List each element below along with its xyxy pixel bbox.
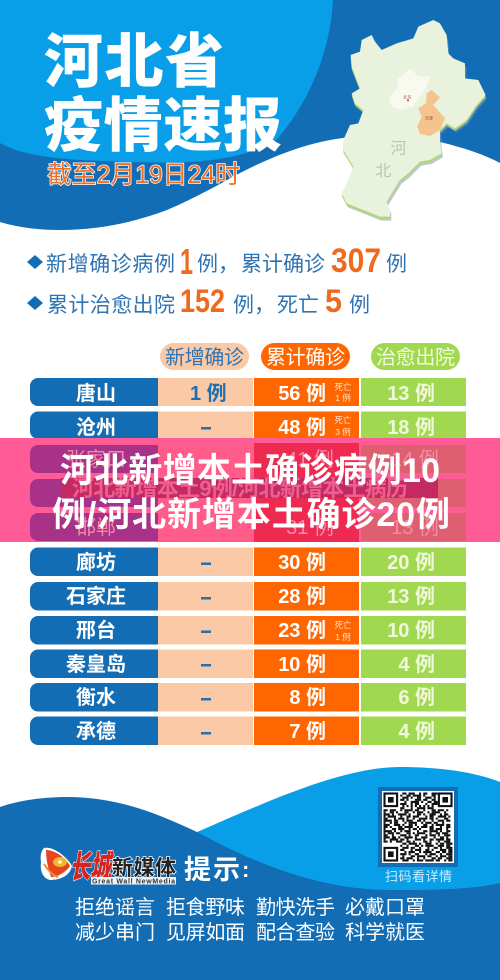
hidden rows under banner: 张家口 bbox=[66, 448, 126, 471]
map surface bbox=[342, 20, 486, 217]
logo wordmark: 新媒体 bbox=[112, 856, 176, 880]
map labels: 河 bbox=[391, 139, 407, 157]
row: 廊坊: 20 例 bbox=[387, 551, 435, 574]
table column headers: 治愈出院 bbox=[376, 346, 455, 369]
tips: 拒绝谣言 bbox=[75, 896, 155, 919]
logo icon bbox=[41, 848, 72, 880]
row: 承德 bbox=[30, 716, 466, 745]
summary line 1: 新增确诊病例 bbox=[46, 253, 175, 276]
row: 邢台: 23 例 bbox=[278, 619, 326, 642]
map labels: 北 bbox=[375, 162, 391, 180]
row: 秦皇岛: 4 例 bbox=[398, 653, 435, 676]
row: 衡水: 衡水 bbox=[76, 686, 116, 709]
row: 承德: 承德 bbox=[76, 720, 116, 743]
summary line 2: 152 bbox=[180, 283, 225, 319]
summary line 1 bbox=[27, 241, 407, 282]
row: 石家庄: 13 例 bbox=[387, 585, 435, 608]
tips: 见屏如面 bbox=[166, 921, 245, 944]
row: 秦皇岛 bbox=[30, 650, 466, 678]
map labels: 北京 bbox=[403, 93, 411, 99]
Beijing bbox=[388, 68, 430, 110]
row: 沧州: 3 例 bbox=[335, 427, 351, 437]
summary line 2: 死亡 bbox=[277, 294, 319, 317]
summary line 1: 累计确诊 bbox=[241, 253, 325, 276]
hidden rows under banner: 31 例 bbox=[286, 516, 334, 539]
hidden rows under banner bbox=[30, 443, 466, 542]
logo script: 长城 bbox=[70, 849, 114, 885]
summary line 2: 例 bbox=[349, 294, 370, 317]
pink banner bbox=[0, 438, 500, 542]
banner headline: 例/河北新增本土确诊20例 bbox=[52, 496, 450, 534]
row: 唐山: 1 例 bbox=[190, 382, 227, 405]
row: 邢台 bbox=[30, 616, 466, 644]
map labels: 天津 bbox=[425, 115, 433, 121]
row: 秦皇岛: 10 例 bbox=[278, 653, 326, 676]
row: 邢台: 邢台 bbox=[76, 618, 116, 642]
row: 沧州 bbox=[30, 412, 466, 439]
row: 沧州: 18 例 bbox=[387, 416, 435, 439]
row: 唐山: 1 例 bbox=[335, 393, 351, 403]
hidden rows under banner: 河北新增本土9例/河北新增本土病历 bbox=[72, 476, 408, 501]
row: 衡水: 8 例 bbox=[289, 686, 326, 709]
row: 石家庄: 28 例 bbox=[278, 585, 326, 608]
row: 沧州: 48 例 bbox=[278, 416, 326, 439]
row: 廊坊 bbox=[30, 548, 466, 576]
row: 唐山 bbox=[30, 378, 466, 406]
tips: 科学就医 bbox=[345, 921, 425, 944]
title: 河北省疫情速报 bbox=[44, 29, 282, 159]
banner headline: 河北新增本土确诊病例10 bbox=[60, 452, 440, 490]
summary line 2: 累计治愈出院 bbox=[47, 294, 175, 317]
table column headers: 累计确诊 bbox=[266, 346, 345, 369]
hidden rows under banner: 邯郸 bbox=[76, 516, 116, 539]
row: 承德: 7 例 bbox=[289, 720, 326, 743]
summary line 1: 例， bbox=[197, 253, 239, 276]
map shadow and edge bbox=[342, 22, 487, 221]
footer background bbox=[0, 767, 500, 980]
hidden rows under banner: 41 例 bbox=[286, 448, 334, 471]
summary line 2: 5 bbox=[325, 283, 342, 319]
row: 衡水 bbox=[30, 683, 466, 712]
row: 承德: 4 例 bbox=[398, 720, 435, 743]
header background bbox=[0, 0, 500, 240]
heading: 提示: 提示 bbox=[184, 855, 240, 885]
hidden rows under banner: 13 例 bbox=[391, 516, 439, 539]
title: 河北省疫情速报: 河北省 bbox=[44, 29, 224, 95]
table column headers bbox=[160, 343, 460, 370]
row: 邢台: 1 例 bbox=[335, 632, 351, 642]
summary line 1: 例 bbox=[386, 253, 407, 276]
row: 秦皇岛: 秦皇岛 bbox=[66, 652, 126, 676]
summary line 1: 1 bbox=[180, 241, 193, 282]
summary line 1: 307 bbox=[331, 242, 381, 280]
QR code bbox=[378, 787, 458, 867]
row: 廊坊: 廊坊 bbox=[76, 550, 116, 574]
hidden rows under banner: 14 例 bbox=[391, 448, 439, 471]
date: 截至2月19日24时: 截至2月19日24时 bbox=[47, 161, 240, 189]
summary line 2: 例， bbox=[233, 294, 275, 317]
banner headline bbox=[52, 452, 450, 534]
logo tagline: Great Wall NewMedia bbox=[92, 878, 175, 886]
row: 石家庄: 石家庄 bbox=[66, 584, 126, 608]
row: 石家庄 bbox=[30, 582, 466, 610]
map of Hebei bbox=[342, 20, 487, 221]
QR caption: 扫码看详情 bbox=[385, 869, 452, 884]
heading: 提示: : bbox=[242, 857, 249, 882]
row: 沧州: 死亡 bbox=[334, 415, 352, 425]
row: 唐山: 死亡 bbox=[334, 382, 352, 392]
tips bbox=[75, 896, 425, 944]
tips: 配合查验 bbox=[256, 921, 335, 944]
tips: 必戴口罩 bbox=[345, 896, 425, 919]
title: 河北省疫情速报: 疫情速报 bbox=[44, 93, 282, 159]
row: 唐山: 56 例 bbox=[278, 382, 326, 405]
map labels bbox=[375, 93, 433, 180]
row: 衡水: 6 例 bbox=[398, 686, 435, 709]
row: 唐山: 13 例 bbox=[387, 382, 435, 405]
row: 廊坊: 30 例 bbox=[278, 551, 326, 574]
table column headers: 新增确诊 bbox=[165, 346, 244, 369]
row: 邢台: 10 例 bbox=[387, 619, 435, 642]
row: 沧州: 沧州 bbox=[76, 415, 116, 439]
row: 唐山: 唐山 bbox=[76, 381, 116, 405]
row: 邢台: 死亡 bbox=[334, 620, 352, 630]
tips: 减少串门 bbox=[75, 921, 155, 944]
tips: 勤快洗手 bbox=[256, 896, 335, 919]
Tianjin bbox=[417, 90, 445, 136]
tips: 拒食野味 bbox=[166, 896, 245, 919]
logo: Great Wall NewMedia bbox=[41, 848, 176, 886]
summary line 2 bbox=[27, 283, 370, 319]
